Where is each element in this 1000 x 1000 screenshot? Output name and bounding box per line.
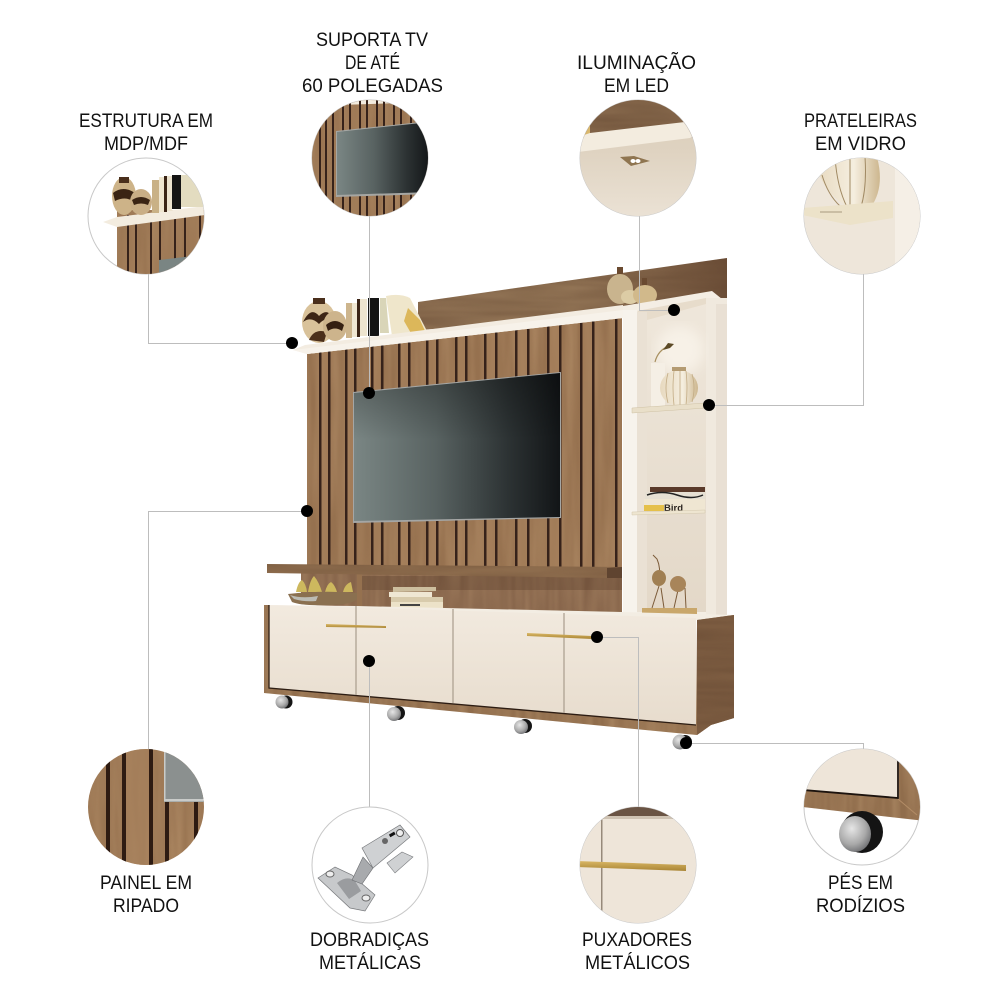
- base top surface: [264, 605, 734, 620]
- marker dots: [286, 304, 715, 749]
- television: [353, 372, 561, 523]
- top shelf vases: [607, 267, 657, 305]
- tower decor: white vase, branch and ribbed vase: [651, 343, 698, 407]
- heading: estrutura: [79, 111, 213, 155]
- heading: suporta TV: SUPORTA TV: [316, 30, 428, 51]
- bird sculptures: [642, 555, 697, 615]
- slatted panel: [307, 310, 622, 575]
- circle detail: gold handle: [578, 805, 698, 925]
- stacked books: [389, 587, 443, 609]
- heading: iluminação: [577, 52, 696, 97]
- fruit bowl with pears: [288, 572, 357, 605]
- heading: painel: PAINEL EM: [100, 873, 192, 894]
- heading: dobradiças: DOBRADIÇAS: [310, 930, 429, 951]
- heading: iluminação: ILUMINAÇÃO: [577, 52, 696, 74]
- heading: estrutura: MDP/MDF: [104, 134, 188, 155]
- heading: dobradiças: METÁLICAS: [319, 953, 421, 974]
- tower books: [644, 487, 705, 514]
- heading: pés: RODÍZIOS: [816, 896, 905, 917]
- lower glass shelf: [632, 510, 705, 515]
- circle detail: wood slats: [86, 747, 208, 867]
- shelf decor: vases, books and open book: [302, 295, 428, 343]
- callout: iluminação em LED: [577, 52, 698, 218]
- callout: prateleiras em vidro: [802, 111, 925, 276]
- heading: iluminação: EM LED: [604, 76, 669, 97]
- heading: suporta TV: [302, 30, 443, 97]
- callout: suporta TV: [302, 30, 443, 220]
- heading: puxadores: METÁLICOS: [585, 953, 690, 974]
- circle detail: metal hinge: [312, 807, 428, 923]
- heading: puxadores: [582, 930, 692, 974]
- connector lines: [148, 216, 864, 807]
- callout: pés em rodízios: [803, 748, 925, 917]
- tower books: Bird: [664, 503, 683, 514]
- heading: dobradiças: [310, 930, 429, 974]
- circle detail: shelf with vases: [88, 158, 210, 280]
- heading: prateleiras: PRATELEIRAS: [804, 111, 917, 132]
- heading: prateleiras: EM VIDRO: [815, 134, 906, 155]
- upper glass shelf: [632, 403, 706, 413]
- circle detail: caster wheel: [803, 748, 925, 865]
- heading: puxadores: PUXADORES: [582, 930, 692, 951]
- gold handles: [326, 624, 386, 628]
- back top wood panel: [418, 258, 727, 330]
- floating wood shelf: [267, 564, 622, 578]
- heading: suporta TV: 60 POLEGADAS: [302, 76, 443, 97]
- heading: suporta TV: DE ATÉ: [345, 53, 400, 74]
- heading: prateleiras: [804, 111, 917, 155]
- base wood frame: [264, 605, 734, 735]
- base cabinet: [264, 605, 734, 735]
- callout: dobradiças metálicas: [310, 807, 429, 974]
- circle detail: LED spot: [578, 98, 698, 218]
- circle detail: TV on slats: [310, 100, 430, 220]
- cream right tower: [623, 291, 727, 615]
- heading: painel: [100, 873, 192, 917]
- callout: estrutura em MDP/MDF: [79, 111, 213, 280]
- casters: [276, 696, 692, 750]
- callout: puxadores metálicos: [578, 805, 698, 974]
- callout: painel em ripado: [86, 747, 208, 917]
- heading: estrutura: ESTRUTURA EM: [79, 111, 213, 132]
- heading: pés: [816, 873, 905, 917]
- doors: [269, 605, 696, 725]
- lower niche wood back: [300, 572, 622, 613]
- heading: painel: RIPADO: [113, 896, 179, 917]
- furniture: TV stand: [264, 258, 734, 750]
- circle detail: glass shelf: [802, 156, 925, 276]
- white top shelf: [293, 305, 623, 354]
- heading: pés: PÉS EM: [828, 873, 893, 894]
